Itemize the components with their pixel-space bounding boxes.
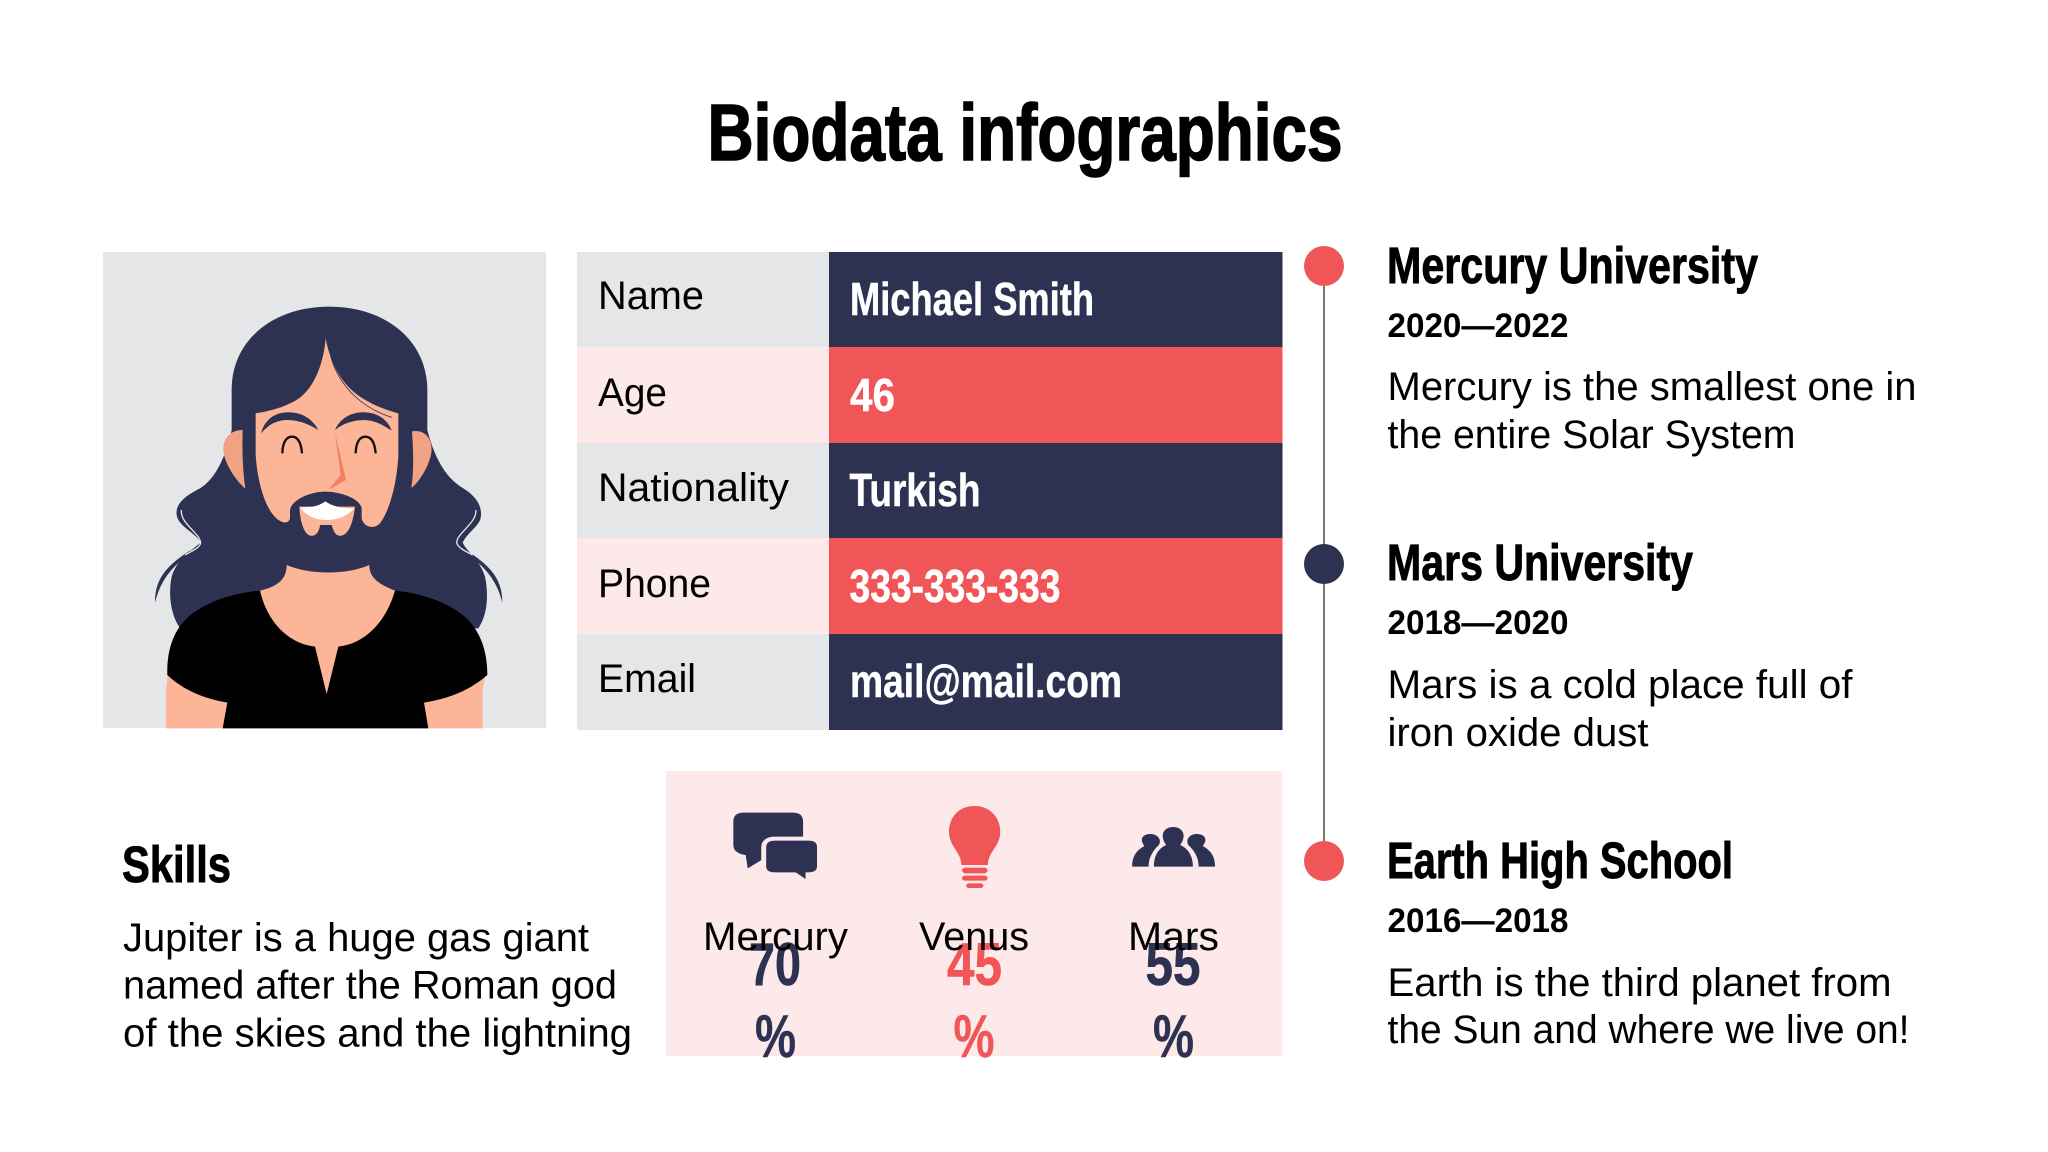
ear left <box>223 430 245 489</box>
row: nationality <box>577 443 1282 538</box>
skills heading: Skills <box>122 836 231 893</box>
metric: mars <box>1128 915 1219 1070</box>
skills text: named after the Roman god <box>123 964 617 1008</box>
title: Biodata infographics <box>708 88 1342 177</box>
metric: mercury: Mercury <box>703 915 848 959</box>
entry: earth high school: 2016—2018 <box>1388 902 1568 940</box>
entry: mars university: Mars University <box>1387 534 1694 591</box>
illustration: long-haired bearded man <box>155 307 502 728</box>
row: email: mail@mail.com <box>850 655 1122 707</box>
arm right <box>422 673 485 728</box>
row: email: Email <box>598 657 696 701</box>
metric: mercury: 70 <box>749 931 801 998</box>
timeline line <box>1323 266 1325 861</box>
icon: light bulb <box>949 806 1000 888</box>
entry: mercury university: Mercury is the smallest one in <box>1388 365 1916 409</box>
entry: mercury university <box>1387 237 1916 457</box>
row: phone: 333-333-333 <box>850 560 1060 612</box>
nose <box>328 433 346 490</box>
hair strand <box>331 357 392 417</box>
timeline marker: mercury <box>1304 246 1344 286</box>
entry: earth high school: Earth High School <box>1387 832 1733 889</box>
entry: earth high school: Earth is the third planet from <box>1388 961 1892 1005</box>
skills text: of the skies and the lightning <box>123 1012 632 1056</box>
row: age: 46 <box>850 369 895 421</box>
arm left <box>166 673 230 728</box>
icon: group of people <box>1132 827 1215 867</box>
entry: mars university: Mars is a cold place full of <box>1388 663 1853 707</box>
row: phone <box>577 538 1282 634</box>
row: name: Michael Smith <box>850 273 1094 325</box>
skills text: Jupiter is a huge gas giant <box>123 916 589 960</box>
metric: mercury: % <box>755 1003 796 1070</box>
entry: mercury university: the entire Solar System <box>1388 413 1796 457</box>
panel: biodata table <box>577 252 1282 730</box>
metric: venus: 45 <box>947 931 1002 998</box>
icon: speech bubbles <box>733 813 820 883</box>
panel: skills description <box>122 836 632 1056</box>
timeline marker: mars <box>1304 544 1344 584</box>
metric: venus <box>919 915 1029 1070</box>
hair and beard <box>170 307 487 628</box>
hair highlight right <box>457 510 476 555</box>
skills text <box>123 916 632 1056</box>
smile <box>300 501 354 520</box>
row: name: Name <box>598 274 704 318</box>
entry: mars university: iron oxide dust <box>1388 711 1648 755</box>
row: email <box>577 634 1282 730</box>
hair wisp right <box>465 551 502 603</box>
panel: skills metrics <box>666 771 1282 1070</box>
timeline <box>1304 237 1916 1052</box>
shirt <box>167 591 487 728</box>
entry: mars university <box>1387 534 1853 755</box>
row: nationality: Turkish <box>850 464 980 516</box>
metric: venus: Venus <box>919 915 1029 959</box>
entry: earth high school <box>1387 832 1910 1052</box>
metric: mars: Mars <box>1128 915 1219 959</box>
entry: mercury university: Mercury University <box>1387 237 1759 294</box>
neck and chest <box>260 565 395 697</box>
hair highlight left <box>181 510 201 555</box>
eyes <box>282 437 302 453</box>
panel: portrait <box>103 252 546 728</box>
timeline marker: earth <box>1304 841 1344 881</box>
eyebrows <box>261 412 318 433</box>
row: age: Age <box>598 371 667 415</box>
entry: mercury university: 2020—2022 <box>1388 307 1568 345</box>
hair wisp left <box>155 551 192 603</box>
row: age <box>577 347 1282 443</box>
goatee patch <box>299 507 355 536</box>
metric: mars: % <box>1153 1003 1194 1070</box>
metric: mercury <box>703 915 848 1070</box>
entry: mars university: 2018—2020 <box>1388 604 1568 642</box>
row: nationality: Nationality <box>598 466 789 510</box>
metric: venus: % <box>954 1003 994 1070</box>
metric: mars: 55 <box>1146 931 1200 998</box>
ear right <box>411 431 432 488</box>
row: phone: Phone <box>598 562 711 606</box>
row: name <box>577 252 1282 347</box>
entry: earth high school: the Sun and where we live on! <box>1388 1008 1910 1052</box>
face <box>256 338 398 527</box>
